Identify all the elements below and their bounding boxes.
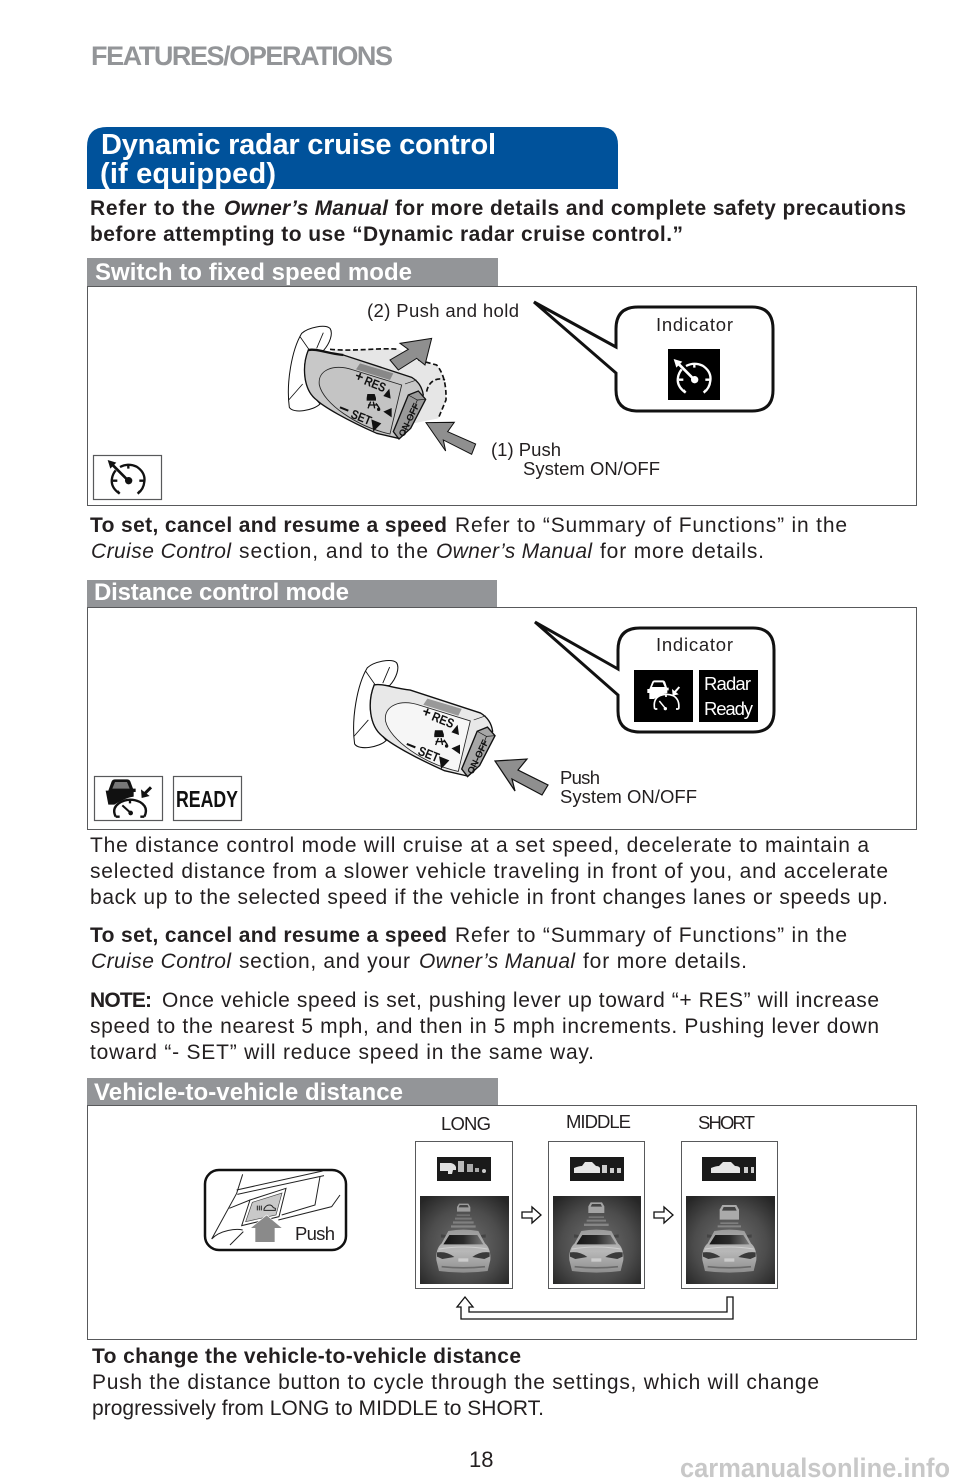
main heading banner [87,127,618,190]
icon: ready [174,776,242,820]
label: push system on/off [491,439,660,479]
steering stalk [354,661,495,777]
text: change distance: progressively from LONG to MIDDLE to SHORT. [92,1397,544,1420]
label: push system on/off: System ON/OFF [560,786,697,807]
text: note: speed to the nearest 5 mph, and then in 5 mph increments. Pushing lever down [90,1015,879,1038]
text: set cancel resume: section, and to the [239,540,428,563]
label: middle: MIDDLE [566,1111,631,1132]
main heading banner: (if equipped) [100,158,276,190]
text: note: NOTE: [90,989,152,1012]
text: set cancel resume: Refer to “Summary of Functions” in the [455,514,847,537]
page number: 18 [469,1447,493,1472]
label: push system on/off: (1) Push [491,439,561,460]
icon: radar ready: Radar [704,673,751,694]
label: long: LONG [441,1113,491,1134]
text: set cancel resume: Cruise Control [91,950,232,973]
arrow: long to middle [522,1207,541,1223]
icon: radar ready: Ready [704,698,754,719]
panel: vehicle-to-vehicle distance [88,1106,916,1340]
section heading: distance control mode [87,579,497,607]
arrow: middle to short [654,1207,673,1223]
icon: indicator gauge [668,349,720,400]
steering stalk: + [420,704,433,722]
text: note [90,989,879,1064]
display: middle [548,1142,644,1288]
label: push system on/off: System ON/OFF [523,458,660,479]
intro text: Owner’s Manual [224,197,389,220]
panel: fixed speed mode [88,286,916,506]
text: set cancel resume: for more details. [600,540,764,563]
section heading: switch to fixed speed mode: Switch to fixed speed mode [95,259,412,286]
steering stalk with push arrows [288,326,476,454]
label: push system on/off [560,767,697,807]
icon: distance button with push arrow [205,1170,346,1250]
intro text: before attempting to use “Dynamic radar cruise control.” [90,223,683,246]
text: set cancel resume: Refer to “Summary of Functions” in the [455,924,847,947]
icon: indicator car gauge [634,670,693,722]
text: distance mode description: The distance control mode will cruise at a set speed, decelerate to maintain a [90,834,869,857]
page section title: FEATURES/OPERATIONS [91,41,393,71]
steering stalk with push arrows: + [353,367,366,385]
display: short [682,1142,778,1288]
intro text [90,197,906,246]
text: distance mode description: selected distance from a slower vehicle traveling in front of you, and accelerate [90,860,888,883]
display: long [416,1142,512,1288]
icon: distance gauge [94,776,162,820]
arrow: push button [495,759,548,795]
icon: fixed speed gauge [94,456,162,500]
intro text: Refer to the [90,197,215,220]
text: set cancel resume: Owner’s Manual [436,540,593,563]
callout: indicator radar ready: Indicator [656,634,733,655]
section heading: vehicle-to-vehicle distance: Vehicle-to-vehicle distance [94,1079,403,1106]
watermark: carmanualsonline.info [680,1453,950,1483]
text: note: Once vehicle speed is set, pushing lever up toward “+ RES” will increase [162,989,879,1012]
icon: ready: READY [176,786,238,812]
callout: indicator: Indicator [656,314,733,335]
text: set cancel resume [90,514,847,563]
callout: indicator [534,302,773,411]
main heading banner: Dynamic radar cruise control [101,129,496,161]
icon: distance button with push arrow: Push [295,1223,335,1244]
text: set cancel resume: Cruise Control [91,540,232,563]
text: set cancel resume: section, and your [239,950,410,973]
text: set cancel resume: To set, cancel and resume a speed [90,514,447,537]
label: push and hold: (2) Push and hold [367,300,519,321]
text: note: toward “- SET” will reduce speed in the same way. [90,1041,594,1064]
text: set cancel resume: Owner’s Manual [419,950,576,973]
steering stalk: SET [416,743,442,766]
arrow: return short to long [457,1297,733,1319]
steering stalk with push arrows: RES [362,374,388,395]
steering stalk: RES [430,709,456,731]
text: change distance: To change the vehicle-to-vehicle distance [92,1345,521,1368]
section heading: distance control mode: Distance control mode [94,579,349,606]
text: change distance: Push the distance button to cycle through the settings, which will change [92,1371,819,1394]
callout: indicator radar ready [535,622,774,732]
steering stalk with push arrows: SET [349,407,374,428]
icon: radar ready [699,670,758,722]
intro text: for more details and complete safety precautions [395,197,906,220]
text: change distance [92,1345,819,1420]
text: distance mode description [90,834,888,909]
text: distance mode description: back up to the selected speed if the vehicle in front changes lanes or speeds up. [90,886,888,909]
text: set cancel resume: for more details. [583,950,747,973]
text: set cancel resume [90,924,847,973]
text: set cancel resume: To set, cancel and resume a speed [90,924,447,947]
steering stalk with push arrows: ON-OFF [397,401,422,438]
panel: distance control mode [88,608,916,830]
label: short: SHORT [698,1112,755,1133]
steering stalk: ON-OFF [466,738,492,776]
label: push system on/off: Push [560,767,600,788]
